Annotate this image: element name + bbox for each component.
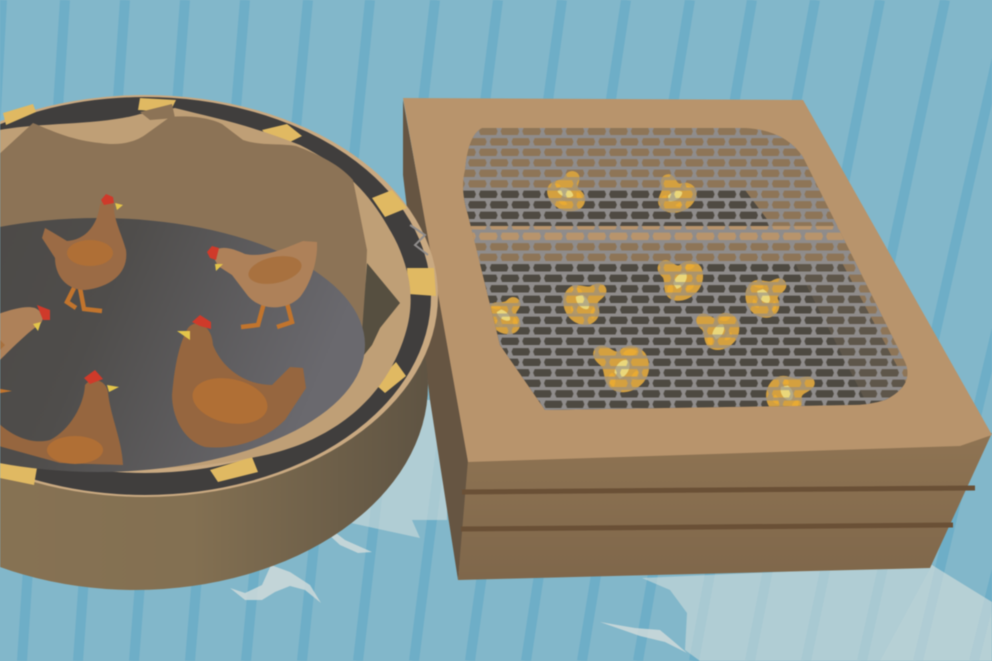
rim notch	[140, 104, 175, 120]
hen E	[0, 305, 50, 394]
bowl inner wall	[0, 116, 367, 370]
chicks tint over mesh	[490, 174, 814, 406]
bowl: round straw enclosure	[0, 95, 438, 590]
hen D	[0, 370, 123, 465]
land: pale coastline overlays	[230, 400, 992, 661]
rim mesh scribble	[410, 225, 428, 255]
hen C	[172, 315, 306, 448]
wall shadow wedge	[360, 263, 400, 360]
bowl rim	[0, 95, 438, 497]
chicks under mesh	[490, 170, 816, 407]
bowl outer wall	[0, 180, 428, 590]
hen A	[42, 194, 126, 311]
crate left side	[403, 100, 470, 580]
mesh window with chicks	[455, 120, 915, 422]
rim dark band	[0, 108, 420, 484]
hen B	[207, 241, 317, 327]
rim yellow ties	[0, 98, 436, 485]
bowl floor	[0, 218, 365, 472]
crate front planks	[458, 433, 992, 580]
crate: wooden brooder box	[403, 98, 992, 580]
crate top face	[403, 98, 992, 462]
rim inner tan lining	[0, 108, 411, 469]
